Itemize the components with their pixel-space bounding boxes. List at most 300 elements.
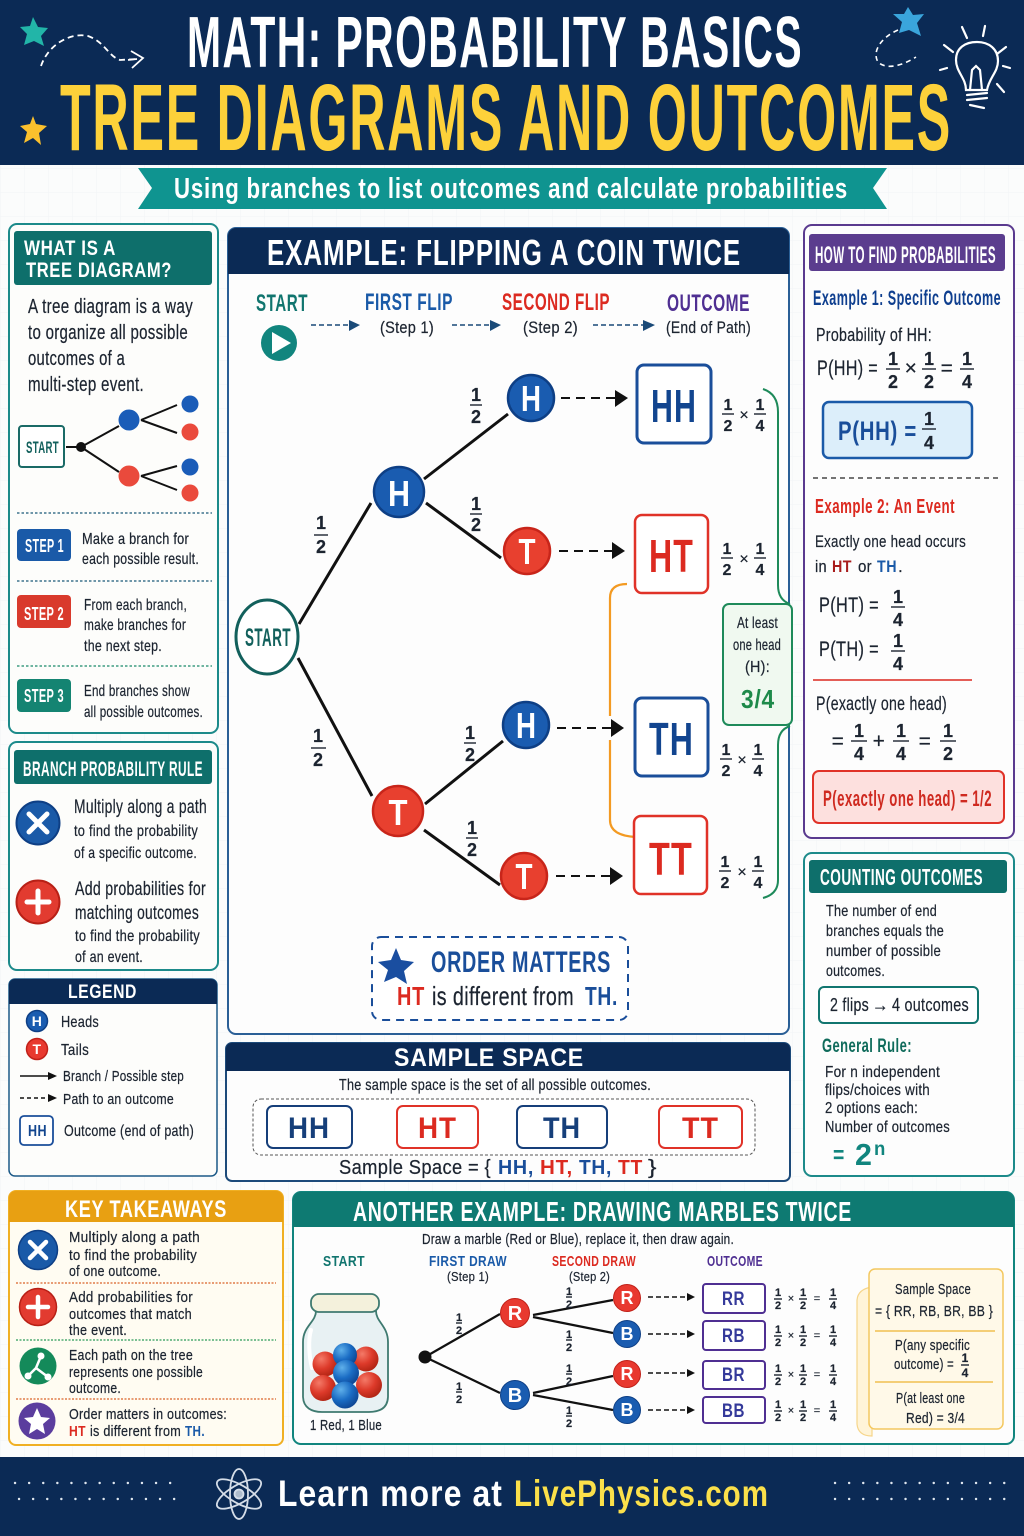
footer text: Learn more at bbox=[278, 1473, 503, 1514]
marble path probabilities: 4 bbox=[830, 1337, 837, 1349]
exactly one head working: 1 bbox=[896, 721, 906, 741]
example 1 working bbox=[816, 325, 974, 392]
marble tree fractions: 2 bbox=[566, 1418, 572, 1430]
marble outcome boxes: BR bbox=[722, 1365, 745, 1386]
marble path probabilities: 1 bbox=[775, 1287, 781, 1299]
example 1 working: 2 bbox=[924, 372, 934, 392]
column label: start: START bbox=[256, 290, 308, 317]
outcomes row: HT bbox=[418, 1112, 457, 1145]
example 2 description bbox=[815, 532, 966, 576]
exactly one head working: = bbox=[919, 730, 931, 753]
marble tree nodes: R bbox=[620, 1288, 634, 1308]
branch fractions: 2 bbox=[313, 750, 323, 770]
step 3: all possible outcomes. bbox=[84, 704, 203, 721]
at least one head bracket bbox=[763, 389, 790, 898]
path probabilities: × bbox=[737, 752, 747, 769]
add rule text: matching outcomes bbox=[75, 903, 199, 924]
icon: teal star bbox=[20, 17, 48, 46]
marble path probabilities: 4 bbox=[830, 1412, 837, 1424]
P(HT) and P(TH): 4 bbox=[893, 610, 903, 630]
takeaway: add: outcomes that match bbox=[69, 1306, 192, 1323]
result box: P(HH) bbox=[823, 402, 972, 458]
callout: marble sample space bbox=[857, 1269, 1003, 1436]
tree nodes: T bbox=[388, 792, 408, 833]
step 2: From each branch, bbox=[84, 597, 187, 614]
branch fractions: 2 bbox=[471, 515, 481, 535]
path probabilities: 4 bbox=[754, 763, 763, 780]
exactly one head working: 1 bbox=[854, 721, 864, 741]
description: The number of end bbox=[826, 903, 937, 920]
exactly one head bracket bbox=[610, 584, 637, 837]
tree nodes: H bbox=[388, 473, 410, 514]
marble tree nodes: B bbox=[620, 1400, 634, 1420]
footer text: LivePhysics.com bbox=[514, 1473, 769, 1514]
marble tree nodes: B bbox=[620, 1324, 634, 1344]
description: outcomes. bbox=[826, 963, 885, 980]
example 2 description: TH bbox=[877, 557, 897, 576]
P(HT) and P(TH): 1 bbox=[893, 587, 903, 607]
marble path probabilities: 1 bbox=[830, 1324, 836, 1336]
definition text: A tree diagram is a way bbox=[28, 296, 193, 318]
marble tree nodes: R bbox=[508, 1303, 523, 1325]
marble path probabilities: × bbox=[788, 1369, 794, 1381]
heading bbox=[9, 979, 217, 1004]
marble path probabilities: × bbox=[788, 1330, 794, 1342]
marble path probabilities: 1 bbox=[830, 1287, 836, 1299]
column label: second flip bbox=[502, 289, 610, 337]
panel: what is a tree diagram bbox=[9, 224, 218, 733]
heading bbox=[809, 234, 1005, 271]
panel: branch probability rule bbox=[9, 742, 218, 970]
takeaway: order: TH. bbox=[185, 1423, 205, 1440]
marble tree fractions bbox=[456, 1286, 572, 1430]
flips to outcomes box bbox=[819, 987, 978, 1023]
sample space set bbox=[339, 1157, 657, 1179]
marble path probabilities: × bbox=[788, 1293, 794, 1305]
marble path probabilities: = bbox=[814, 1330, 820, 1342]
sample space set: TH, bbox=[579, 1157, 612, 1179]
step 2: the next step. bbox=[84, 638, 162, 655]
column label: second flip: (Step 2) bbox=[523, 318, 578, 337]
result box: P(HH): 1 bbox=[924, 409, 934, 429]
legend: heads bbox=[26, 1010, 99, 1032]
marble path probabilities: 2 bbox=[800, 1376, 806, 1388]
legend: branch arrow bbox=[20, 1068, 184, 1085]
marble tree nodes: B bbox=[508, 1385, 522, 1407]
arrow bbox=[452, 320, 501, 331]
marble outcome boxes: RB bbox=[722, 1326, 745, 1347]
flips to outcomes box: → bbox=[872, 995, 889, 1015]
callout: at least one head: one head bbox=[733, 637, 781, 654]
marble path probabilities: 1 bbox=[775, 1399, 781, 1411]
marble path probabilities: 1 bbox=[800, 1287, 806, 1299]
path probabilities: 4 bbox=[754, 875, 763, 892]
icon: marble jar bbox=[303, 1294, 388, 1412]
general rule: For n independent bbox=[825, 1064, 940, 1081]
exactly one head working bbox=[816, 694, 956, 764]
heading bbox=[226, 1043, 790, 1072]
heading: KEY TAKEAWAYS bbox=[65, 1196, 227, 1223]
heading bbox=[14, 231, 212, 285]
definition text bbox=[28, 296, 193, 396]
example 1 working: Probability of HH: bbox=[816, 325, 932, 345]
marble path probabilities: 2 bbox=[800, 1300, 806, 1312]
path probabilities: 4 bbox=[756, 418, 765, 435]
callout: order matters: ORDER MATTERS bbox=[431, 946, 611, 979]
marble tree fractions: 1 bbox=[566, 1363, 572, 1375]
tree nodes: H bbox=[521, 378, 541, 419]
decorative dots left bbox=[15, 1483, 1005, 1499]
sample space set: } bbox=[648, 1157, 657, 1179]
sample space set: TT bbox=[618, 1157, 643, 1179]
takeaway: paths: Each path on the tree bbox=[69, 1347, 193, 1364]
sample space set: HT, bbox=[540, 1157, 573, 1179]
marble tree fractions: 2 bbox=[456, 1325, 462, 1337]
marble outcome boxes bbox=[703, 1284, 765, 1423]
path probabilities: 1 bbox=[723, 541, 732, 558]
takeaway: order: is different from bbox=[90, 1423, 181, 1440]
takeaway: multiply: to find the probability bbox=[69, 1247, 197, 1264]
outcomes row: TH bbox=[543, 1112, 581, 1145]
branch fractions: 1 bbox=[313, 726, 323, 746]
takeaway: add: Add probabilities for bbox=[69, 1289, 193, 1306]
jar caption: 1 Red, 1 Blue bbox=[310, 1417, 382, 1434]
path probabilities: 2 bbox=[724, 418, 733, 435]
branch fractions: 1 bbox=[316, 513, 326, 533]
callout: marble sample space: Red) = 3/4 bbox=[906, 1410, 965, 1427]
takeaway: multiply: Multiply along a path bbox=[69, 1229, 200, 1246]
example 2 description: Exactly one head occurs bbox=[815, 532, 966, 551]
description: branches equals the bbox=[826, 923, 944, 940]
callout: marble sample space: P(any specific bbox=[895, 1337, 970, 1354]
heading: BRANCH PROBABILITY RULE bbox=[23, 758, 203, 781]
marble outcome boxes: RR bbox=[722, 1289, 745, 1310]
tree nodes: T bbox=[518, 531, 536, 572]
branch fractions: 2 bbox=[316, 537, 326, 557]
arrow bbox=[311, 320, 360, 331]
panel: legend bbox=[9, 979, 217, 1176]
panel: key takeaways bbox=[9, 1191, 283, 1445]
marble tree fractions: 1 bbox=[456, 1381, 462, 1393]
column labels: (Step 2) bbox=[569, 1269, 610, 1284]
marble tree fractions: 1 bbox=[566, 1286, 572, 1298]
callout: marble sample space: P(at least one bbox=[896, 1390, 965, 1407]
branch fractions: 1 bbox=[465, 723, 475, 743]
marble path probabilities: 1 bbox=[830, 1399, 836, 1411]
example 1 working: 1 bbox=[924, 349, 934, 369]
panel: marbles example bbox=[293, 1192, 1014, 1444]
column labels bbox=[323, 1253, 763, 1284]
icon: yellow star bbox=[20, 116, 47, 145]
path probabilities: 1 bbox=[756, 541, 765, 558]
path probabilities: 2 bbox=[722, 763, 731, 780]
general rule bbox=[822, 1036, 950, 1172]
callout: marble sample space: 1 bbox=[962, 1351, 969, 1365]
add rule text bbox=[75, 879, 206, 966]
marble outcome boxes: BB bbox=[722, 1401, 745, 1422]
callout: order matters: TH. bbox=[585, 981, 618, 1011]
P(HT) and P(TH): P(HT) = bbox=[819, 594, 879, 617]
marble path probabilities: 1 bbox=[800, 1363, 806, 1375]
column labels: (Step 1) bbox=[447, 1269, 489, 1284]
heading: TREE DIAGRAM? bbox=[26, 259, 172, 282]
icon: add bbox=[16, 880, 60, 924]
step 3: STEP 3 bbox=[24, 686, 64, 706]
takeaway: order bbox=[18, 1402, 227, 1440]
branch fractions: 2 bbox=[465, 745, 475, 765]
description: number of possible bbox=[826, 943, 941, 960]
subtitle ribbon bbox=[138, 168, 887, 209]
legend: outcome box bbox=[20, 1116, 194, 1145]
example 1 working: 1 bbox=[888, 349, 898, 369]
marble dashed arrows bbox=[648, 1293, 695, 1414]
flips to outcomes box: 4 outcomes bbox=[892, 995, 969, 1015]
branch fractions: 2 bbox=[467, 840, 477, 860]
legend: branch arrow: Branch / Possible step bbox=[63, 1068, 184, 1085]
example 1 working: P(HH) = bbox=[817, 357, 878, 380]
instructions: Draw a marble (Red or Blue), replace it, then draw again. bbox=[422, 1231, 734, 1248]
step 3: End branches show bbox=[84, 683, 190, 700]
general rule: n bbox=[874, 1139, 886, 1160]
marble tree fractions: 2 bbox=[566, 1299, 572, 1311]
takeaway: paths bbox=[20, 1347, 203, 1397]
exactly one head working: 4 bbox=[854, 744, 864, 764]
heading bbox=[9, 1191, 283, 1223]
takeaway: multiply bbox=[18, 1229, 200, 1280]
callout: at least one head: 3/4 bbox=[741, 684, 775, 714]
heading: LEGEND bbox=[68, 982, 137, 1003]
example 2 description: HT bbox=[832, 557, 852, 576]
marble path probabilities: 4 bbox=[830, 1300, 837, 1312]
marble path probabilities bbox=[774, 1287, 837, 1424]
takeaway: paths: outcome. bbox=[69, 1380, 121, 1397]
exactly one head working: + bbox=[873, 730, 885, 753]
outcomes row bbox=[253, 1099, 755, 1155]
callout: order matters: HT bbox=[397, 981, 425, 1011]
panel: counting outcomes bbox=[804, 853, 1014, 1176]
path probabilities: 1 bbox=[754, 854, 763, 871]
exactly one head working: P(exactly one head) bbox=[816, 694, 947, 715]
column labels: OUTCOME bbox=[707, 1253, 763, 1270]
marble tree fractions: 1 bbox=[566, 1329, 572, 1341]
marble tree start dot bbox=[418, 1350, 432, 1364]
outcome TH: TH bbox=[649, 713, 694, 765]
column labels: START bbox=[323, 1253, 365, 1270]
callout: marble sample space: 4 bbox=[962, 1366, 969, 1380]
marble tree fractions: 2 bbox=[566, 1376, 572, 1388]
icon: blue star bbox=[893, 7, 924, 36]
arrow heads bbox=[610, 390, 628, 885]
marble path probabilities: 2 bbox=[800, 1412, 806, 1424]
result box: exactly one head bbox=[813, 771, 1004, 823]
legend: path arrow: Path to an outcome bbox=[63, 1091, 174, 1108]
general rule: = bbox=[833, 1142, 845, 1169]
callout: order matters: is different from bbox=[432, 981, 574, 1011]
example 1 working: × bbox=[905, 357, 917, 380]
legend: tails: Tails bbox=[61, 1042, 89, 1059]
path probabilities bbox=[719, 397, 766, 892]
marble path probabilities: 1 bbox=[775, 1324, 781, 1336]
path probabilities: 1 bbox=[724, 397, 733, 414]
definition text: outcomes of a bbox=[28, 348, 125, 370]
marble tree nodes bbox=[500, 1284, 640, 1424]
definition text: to organize all possible bbox=[28, 322, 188, 344]
heading: EXAMPLE: FLIPPING A COIN TWICE bbox=[267, 232, 741, 273]
outcome HH: HH bbox=[651, 380, 697, 432]
marble path probabilities: = bbox=[814, 1369, 820, 1381]
path probabilities: 1 bbox=[754, 742, 763, 759]
icon: dashed arrow left bbox=[41, 35, 143, 68]
result box: P(HH): P(HH) = bbox=[838, 416, 917, 446]
sample space set: HH, bbox=[498, 1157, 534, 1179]
general rule: 2 bbox=[855, 1137, 873, 1172]
step 1: each possible result. bbox=[82, 551, 199, 568]
marble tree branches bbox=[425, 1300, 613, 1410]
heading: SAMPLE SPACE bbox=[394, 1044, 584, 1072]
legend: heads: Heads bbox=[61, 1014, 99, 1031]
path probabilities: × bbox=[739, 407, 749, 424]
takeaway: order: Order matters in outcomes: bbox=[69, 1406, 227, 1423]
start node bbox=[236, 600, 298, 674]
general rule: Number of outcomes bbox=[825, 1119, 950, 1136]
example 1 working: 4 bbox=[962, 372, 972, 392]
path probabilities: × bbox=[739, 551, 749, 568]
path probabilities: 1 bbox=[721, 854, 730, 871]
legend: tails: T bbox=[32, 1041, 42, 1057]
callout: marble sample space: Sample Space bbox=[895, 1281, 971, 1298]
step 2 bbox=[17, 595, 187, 655]
P(HT) and P(TH): P(TH) = bbox=[819, 638, 879, 661]
step 3 bbox=[17, 679, 203, 721]
column label: first flip: (Step 1) bbox=[380, 318, 434, 337]
result box: P(HH): 4 bbox=[924, 433, 934, 453]
icon: multiply bbox=[16, 802, 60, 844]
P(HT) and P(TH): 4 bbox=[893, 654, 903, 674]
legend: tails bbox=[26, 1038, 89, 1060]
add rule text: of an event. bbox=[75, 949, 143, 966]
column label: second flip: SECOND FLIP bbox=[502, 289, 610, 316]
heading bbox=[228, 228, 789, 274]
example 1 working: = bbox=[941, 357, 953, 380]
outcomes row: TT bbox=[682, 1112, 719, 1145]
marble path probabilities: 1 bbox=[830, 1363, 836, 1375]
add rule text: to find the probability bbox=[75, 928, 200, 945]
tree nodes: T bbox=[516, 856, 532, 897]
path probabilities: × bbox=[737, 864, 747, 881]
exactly one head working: = bbox=[832, 730, 844, 753]
P(HT) and P(TH) bbox=[819, 587, 905, 674]
path probabilities: 1 bbox=[722, 742, 731, 759]
marble path probabilities: 1 bbox=[800, 1324, 806, 1336]
P(HT) and P(TH): 1 bbox=[893, 631, 903, 651]
takeaway: add bbox=[20, 1288, 193, 1339]
marble path probabilities: 2 bbox=[775, 1376, 781, 1388]
start node: START bbox=[245, 624, 291, 652]
legend: path arrow bbox=[20, 1091, 174, 1108]
panel: how to find probabilities bbox=[804, 225, 1014, 838]
branch fractions: 1 bbox=[467, 818, 477, 838]
legend: outcome box: HH bbox=[28, 1123, 47, 1140]
description bbox=[826, 903, 944, 980]
legend: heads: H bbox=[32, 1013, 42, 1029]
icon: atom bbox=[213, 1469, 265, 1519]
branch fractions: 2 bbox=[471, 407, 481, 427]
example 2 description: or bbox=[858, 557, 872, 576]
marble path probabilities: × bbox=[788, 1405, 794, 1417]
footer text bbox=[278, 1473, 769, 1514]
exactly one head working: 1 bbox=[943, 721, 953, 741]
panel: sample space bbox=[226, 1043, 790, 1181]
path probabilities: 1 bbox=[756, 397, 765, 414]
takeaway: order: HT bbox=[69, 1423, 86, 1440]
column labels: FIRST DRAW bbox=[429, 1253, 507, 1270]
marble path probabilities: = bbox=[814, 1293, 820, 1305]
step 1: Make a branch for bbox=[82, 531, 189, 548]
sample space set: Sample Space = { bbox=[339, 1157, 491, 1179]
mini tree diagram bbox=[19, 396, 198, 502]
marble path probabilities: = bbox=[814, 1405, 820, 1417]
callout: at least one head: (H): bbox=[745, 659, 770, 676]
multiply rule text: Multiply along a path bbox=[74, 797, 207, 818]
takeaway: add: the event. bbox=[69, 1322, 127, 1339]
step 1: STEP 1 bbox=[25, 536, 64, 556]
column label: outcome: OUTCOME bbox=[667, 290, 750, 317]
marble path probabilities: 2 bbox=[775, 1412, 781, 1424]
branch fractions: 1 bbox=[471, 385, 481, 405]
outcomes row: HH bbox=[288, 1112, 330, 1145]
marble tree nodes: R bbox=[620, 1364, 634, 1384]
marble path probabilities: 2 bbox=[775, 1300, 781, 1312]
icon: light bulb bbox=[940, 26, 1010, 108]
tree branches bbox=[298, 414, 508, 885]
mini tree diagram: START bbox=[26, 438, 59, 457]
step 2: make branches for bbox=[84, 617, 186, 634]
definition text: multi-step event. bbox=[28, 374, 144, 396]
multiply rule text: to find the probability bbox=[74, 823, 198, 840]
outcome HT bbox=[635, 515, 708, 593]
arrow bbox=[593, 320, 655, 331]
marble tree fractions: 1 bbox=[456, 1312, 462, 1324]
heading bbox=[14, 750, 212, 784]
marble path probabilities: 4 bbox=[830, 1376, 837, 1388]
marble tree fractions: 2 bbox=[456, 1394, 462, 1406]
icon: dashed arc right bbox=[876, 30, 916, 66]
column label: outcome: (End of Path) bbox=[666, 318, 751, 337]
marble path probabilities: 2 bbox=[800, 1337, 806, 1349]
example 2 description: . bbox=[898, 557, 903, 576]
column labels: SECOND DRAW bbox=[552, 1253, 636, 1270]
outcome TT: TT bbox=[649, 833, 693, 885]
outcome HT: HT bbox=[649, 530, 694, 582]
column label: outcome bbox=[666, 290, 751, 337]
dashed arrows to outcomes bbox=[556, 398, 616, 876]
general rule: 2 options each: bbox=[825, 1100, 918, 1117]
marble path probabilities: 2 bbox=[775, 1337, 781, 1349]
branch fractions bbox=[311, 385, 482, 860]
header banner bbox=[0, 0, 1024, 171]
column label: first flip bbox=[365, 289, 453, 337]
step 1 bbox=[17, 529, 199, 568]
flips to outcomes box: 2 flips bbox=[830, 995, 869, 1015]
callout: at least one head: At least bbox=[737, 615, 778, 632]
example 1 working: 2 bbox=[888, 372, 898, 392]
heading bbox=[809, 860, 1007, 893]
outcome TT bbox=[634, 816, 707, 894]
legend: outcome box: Outcome (end of path) bbox=[64, 1123, 194, 1140]
takeaway: paths: represents one possible bbox=[69, 1364, 203, 1381]
branch fractions: 1 bbox=[471, 494, 481, 514]
example 2 description: in bbox=[815, 557, 827, 576]
